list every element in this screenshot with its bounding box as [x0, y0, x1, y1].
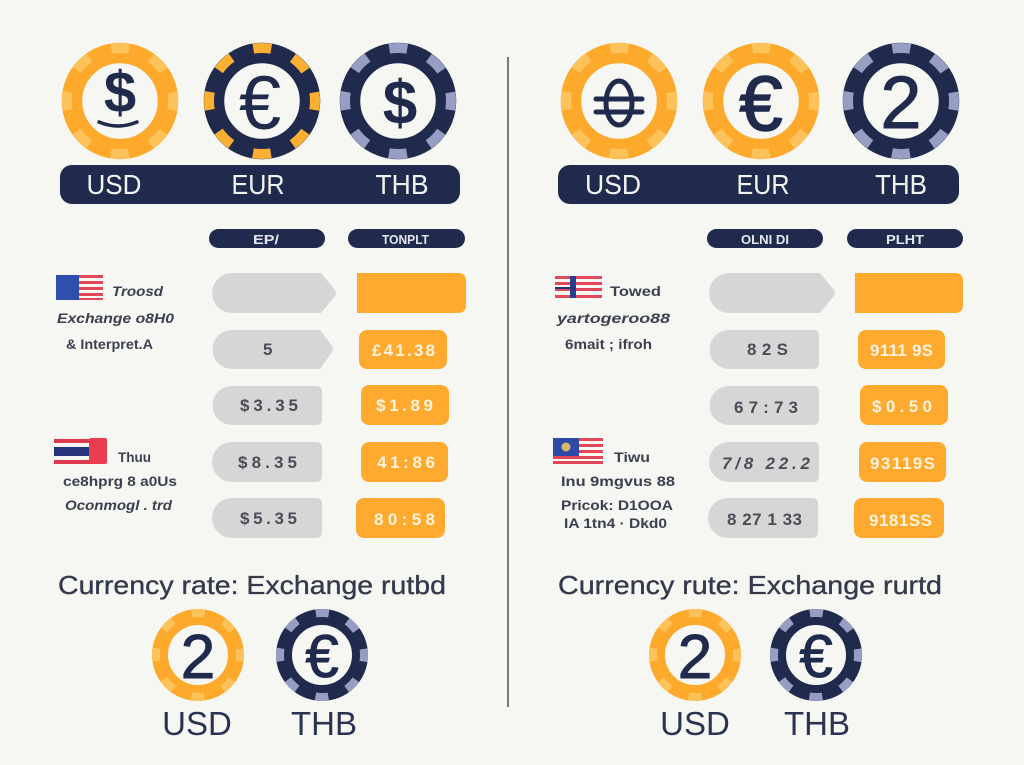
table rows: grey values left: $8.35: [238, 453, 297, 472]
table rows: grey values right: 8 27 1 33: [727, 510, 802, 529]
table rows: grey values right: 8 2 S: [747, 340, 788, 359]
table rows: orange values left: 41:86: [377, 453, 435, 472]
text block: second note left: Thuu: [118, 449, 151, 465]
table rows: grey values right: [708, 273, 835, 538]
currency label bar right: [558, 165, 959, 204]
text block: first note right: yartogeroo88: [556, 310, 670, 326]
icon: blue canton flag right: [553, 438, 603, 464]
heading: right: Currency rute: Exchange rurtd: [558, 570, 942, 600]
table rows: orange values right: [854, 273, 963, 538]
icon: bottom THB coin right: [774, 613, 858, 697]
icon: EUR coin left: €: [239, 61, 281, 146]
icon: Thai flag left: [54, 438, 107, 464]
column header: first right: [707, 229, 823, 248]
label: bottom THB left: THB: [291, 705, 357, 742]
text block: first note right: 6mait ; ifroh: [565, 336, 652, 352]
currency label bar right: THB: [875, 169, 927, 200]
icon: bottom USD coin left: [156, 613, 240, 697]
text block: second note right: [561, 449, 675, 531]
icon: USD coin right: [566, 48, 672, 154]
table rows: grey values left: [212, 273, 336, 538]
icon: THB coin left: [345, 48, 451, 154]
table rows: grey values left: 5: [263, 340, 272, 359]
text block: second note right: IA 1tn4 · Dkd0: [564, 515, 667, 531]
icon: THB coin left: $: [383, 69, 417, 138]
currency label bar left: [60, 165, 460, 204]
table rows: orange values right: 93119S: [870, 454, 935, 473]
text block: first note left: Troosd: [112, 283, 163, 299]
icon: USD coin left: $: [104, 60, 136, 125]
panel: left comparison: [54, 48, 466, 742]
icon: bottom USD coin left: 2: [181, 623, 215, 692]
table rows: orange values left: £41.38: [372, 341, 435, 360]
icon: bottom USD coin right: [653, 613, 737, 697]
column header: second left: TONPLT: [382, 232, 429, 247]
icon: EUR coin left: [209, 48, 315, 154]
text block: second note right: Tiwu: [614, 449, 650, 465]
icon: US flag left: [56, 275, 103, 300]
text block: first note right: [556, 283, 670, 352]
text block: second note left: Oconmogl . trd: [65, 497, 172, 513]
text block: first note left: & Interpret.A: [66, 336, 153, 352]
label: bottom USD right: USD: [660, 705, 730, 742]
text block: second note right: Inu 9mgvus 88: [561, 473, 675, 489]
text block: first note left: Exchange o8H0: [57, 310, 174, 326]
icon: bottom THB coin left: [280, 613, 364, 697]
column header: second right: PLHT: [886, 232, 924, 247]
label: bottom USD left: USD: [162, 705, 232, 742]
icon: EUR coin right: [708, 48, 814, 154]
currency label bar left: THB: [376, 169, 428, 200]
icon: bottom THB coin right: €: [799, 623, 833, 690]
table rows: grey values left: $3.35: [240, 396, 298, 415]
column header: first left: [209, 229, 325, 248]
currency label bar left: EUR: [232, 169, 284, 200]
table rows: orange values left: [356, 273, 466, 538]
text block: second note right: Pricok: D1OOA: [561, 497, 673, 513]
text block: second note left: [63, 449, 177, 513]
icon: USD coin left: [67, 48, 173, 154]
heading: left: Currency rate: Exchange rutbd: [58, 570, 446, 600]
icon: bottom USD coin right: 2: [678, 623, 712, 692]
currency label bar right: EUR: [736, 169, 790, 200]
panel: right comparison: [553, 48, 963, 742]
column header: second right: [847, 229, 963, 248]
table rows: orange values left: 80:58: [374, 510, 435, 529]
icon: THB coin right: [848, 48, 954, 154]
icon: EUR coin right: €: [739, 59, 783, 147]
table rows: grey values right: 67:73: [734, 398, 798, 417]
icon: THB coin right: 2: [880, 61, 922, 144]
table rows: orange values right: $0.50: [872, 397, 932, 416]
icon: striped flag right: [555, 276, 602, 298]
label: bottom THB right: THB: [784, 705, 850, 742]
column header: first left: EP/: [253, 232, 279, 247]
table rows: orange values left: $1.89: [376, 396, 433, 415]
table rows: grey values left: $5.35: [240, 509, 297, 528]
table rows: grey values right: 7/8 22.2: [722, 454, 811, 473]
column header: first right: OLNI DI: [741, 232, 789, 247]
text block: first note left: [57, 283, 174, 352]
currency label bar left: USD: [86, 169, 142, 200]
icon: bottom THB coin left: €: [305, 623, 339, 690]
currency label bar right: USD: [585, 169, 641, 200]
text block: second note left: ce8hprg 8 a0Us: [63, 473, 177, 489]
text block: first note right: Towed: [610, 283, 661, 299]
table rows: orange values right: 9111 9S: [870, 341, 933, 360]
table rows: orange values right: 9181SS: [869, 511, 932, 530]
column header: second left: [348, 229, 465, 248]
